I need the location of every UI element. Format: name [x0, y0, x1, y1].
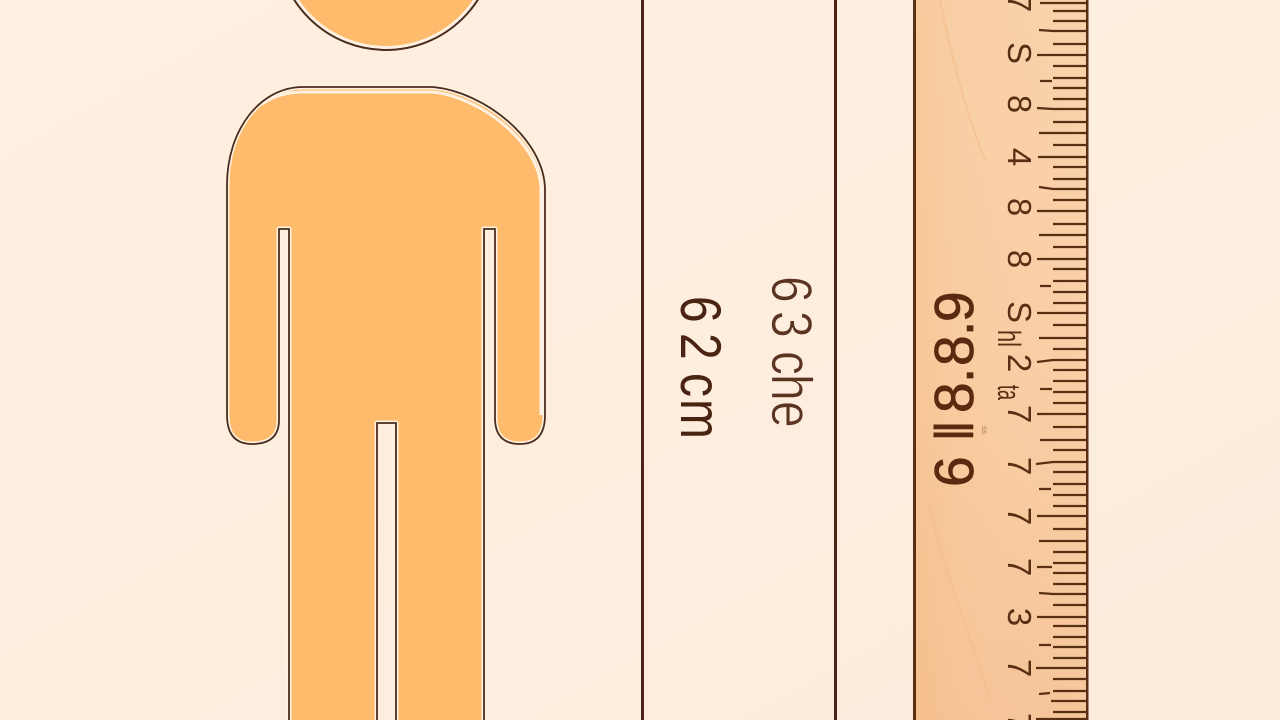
ruler small numbers: 4: [1001, 148, 1038, 166]
ruler: [913, 0, 1088, 720]
ruler small numbers: 7: [1001, 507, 1038, 525]
ruler tiny marks: [980, 330, 1027, 434]
ruler small numbers: 7: [1001, 457, 1038, 475]
figure body: [227, 87, 545, 720]
label: 63che: 63che: [759, 276, 823, 428]
ruler small numbers: S: [1001, 42, 1038, 64]
icon: person figure: [227, 0, 545, 720]
ruler small numbers: 7: [1001, 558, 1038, 576]
ruler small numbers: S: [1001, 301, 1038, 323]
ruler tiny marks: ss: [980, 426, 989, 434]
ruler large reading: 6ll8.8.9: [923, 291, 985, 487]
ruler tick marks: [1036, 3, 1087, 719]
ruler small numbers: 7: [1001, 405, 1038, 423]
measurement line right: [834, 0, 837, 720]
figure head: [277, 0, 495, 50]
label: 62 cm: 62cm: [668, 296, 732, 439]
measurement line left: [641, 0, 644, 720]
ruler small numbers: 2: [1001, 354, 1038, 372]
ruler wood body: [913, 0, 1088, 720]
ruler tiny marks: ta: [991, 385, 1027, 400]
ruler small numbers: 8: [1001, 95, 1038, 113]
ruler small numbers: [1001, 0, 1038, 720]
ruler small numbers: 8: [1001, 250, 1038, 268]
ruler tiny marks: hl: [991, 330, 1027, 347]
ruler small numbers: 7: [1001, 659, 1038, 677]
ruler small numbers: 8: [1001, 198, 1038, 216]
ruler small numbers: 3: [1001, 608, 1038, 626]
